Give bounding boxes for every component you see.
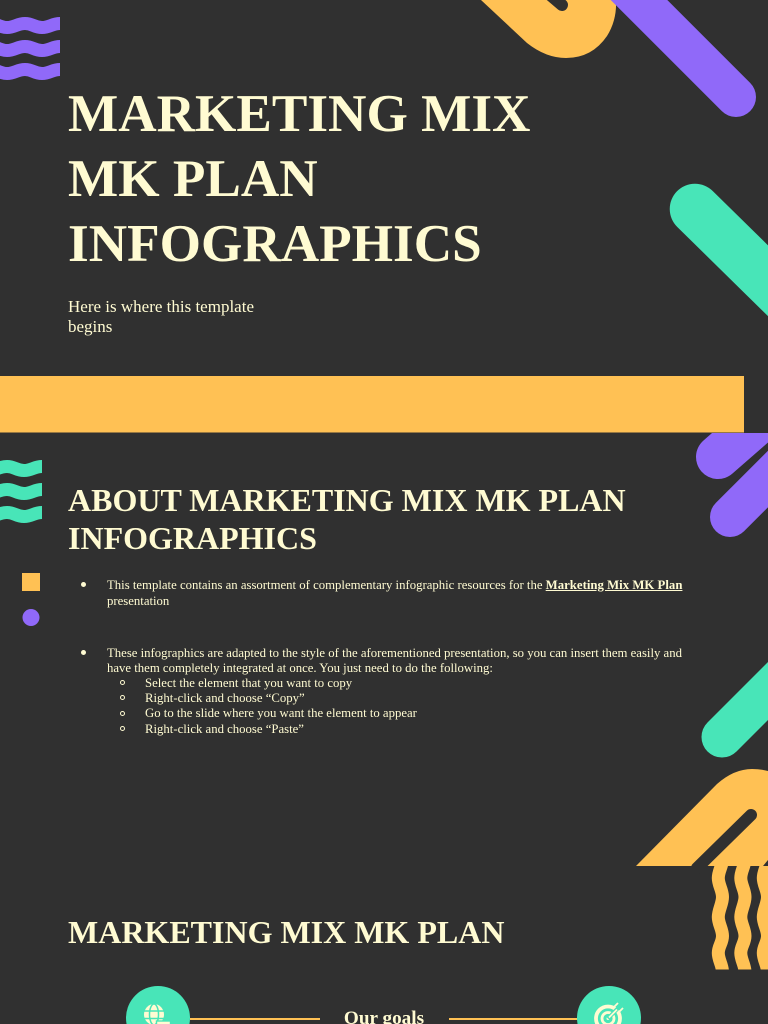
icon: target badge bbox=[577, 986, 641, 1024]
heading: about: INFOGRAPHICS bbox=[68, 520, 317, 556]
shape: lower green bar bbox=[722, 649, 768, 737]
shape: purple bars under banner bbox=[718, 394, 768, 517]
sub-list: Right-click and choose “Copy” bbox=[145, 691, 305, 705]
sub-list bbox=[145, 676, 417, 736]
title: INFOGRAPHICS bbox=[68, 214, 482, 272]
subtitle bbox=[68, 296, 254, 336]
subtitle: Here is where this template bbox=[68, 296, 254, 316]
shape: purple circle bbox=[22, 609, 40, 626]
shape: left green waves bbox=[0, 466, 42, 516]
shape: right green bar bbox=[695, 209, 768, 322]
sub-list markers bbox=[120, 680, 125, 731]
bullet 2: These infographics are adapted to the style of the aforementioned presentation, so you can insert them easily and bbox=[107, 646, 682, 660]
sub-list: Select the element that you want to copy bbox=[145, 676, 352, 690]
shape: top purple bar bbox=[616, 0, 736, 97]
bullet 1: presentation bbox=[107, 594, 169, 608]
title: MARKETING MIX bbox=[68, 84, 530, 142]
title bbox=[68, 84, 530, 272]
heading: about bbox=[68, 482, 626, 556]
bullet 1: This template contains an assortment of complementary infographic resources for the Marketing Mix MK Plan bbox=[107, 578, 682, 592]
subtitle: begins bbox=[68, 316, 112, 336]
connector line: left bbox=[190, 1018, 320, 1020]
sub-list: Go to the slide where you want the element to appear bbox=[145, 706, 417, 720]
bullet 2 bbox=[81, 646, 682, 675]
shape: top-left purple waves bbox=[0, 24, 60, 74]
heading: marketing mix mk plan: MARKETING MIX MK PLAN bbox=[68, 914, 504, 950]
shape: yellow banner bbox=[0, 376, 744, 432]
shape: lower yellow wedge bbox=[636, 769, 768, 868]
shape: yellow square bbox=[22, 573, 40, 591]
heading: about: ABOUT MARKETING MIX MK PLAN bbox=[68, 482, 626, 518]
bullet 2: have them completely integrated at once. You just need to do the following: bbox=[107, 661, 493, 675]
shape: top yellow rounded bar bbox=[481, 0, 616, 58]
icon: globe badge bbox=[126, 986, 190, 1024]
shape: yellow vertical waves bbox=[718, 859, 768, 972]
sub-list: Right-click and choose “Paste” bbox=[145, 722, 304, 736]
bullet 1 bbox=[81, 578, 682, 608]
bullet list bbox=[81, 578, 682, 736]
title: MK PLAN bbox=[68, 148, 318, 208]
connector line: right bbox=[449, 1018, 579, 1020]
